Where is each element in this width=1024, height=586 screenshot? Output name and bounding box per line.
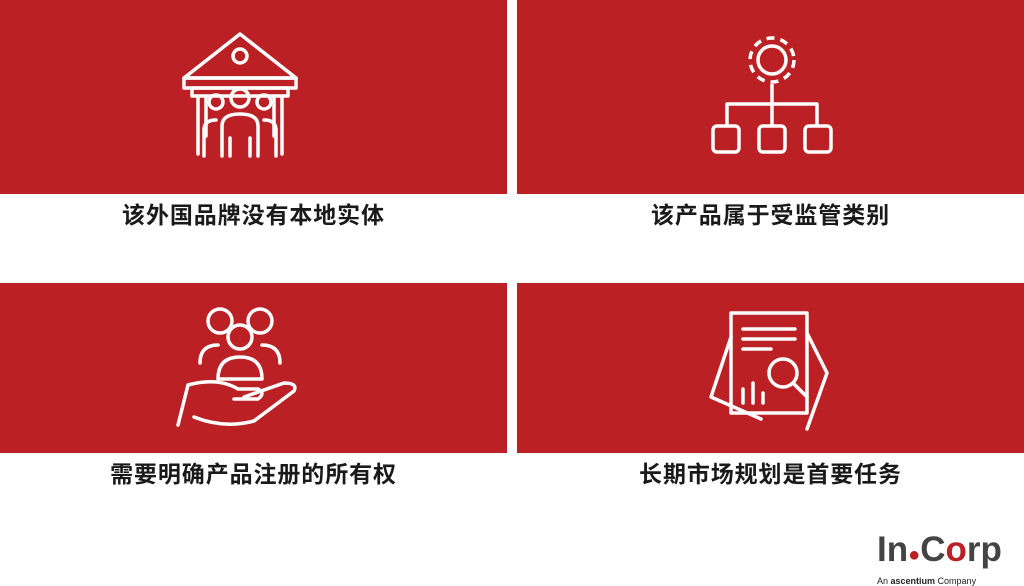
icon: government building with people bbox=[182, 32, 298, 158]
text: caption bottom-right: 长期市场规划是首要任务 bbox=[639, 461, 902, 487]
logo: InCorp bbox=[877, 530, 1002, 586]
text: caption bottom-left: 需要明确产品注册的所有权 bbox=[110, 461, 397, 487]
icon: gear hierarchy bbox=[711, 36, 833, 154]
icon: hand holding people bbox=[176, 307, 297, 427]
icon: document with magnifier bbox=[709, 311, 829, 431]
logo: InCorp: In●Corp bbox=[877, 530, 1002, 569]
panel: bottom-left bbox=[0, 283, 507, 453]
panel: bottom-right bbox=[517, 283, 1024, 453]
logo: InCorp: An ascentium Company bbox=[877, 576, 976, 586]
panel: top-left bbox=[0, 0, 507, 194]
text: caption top-right: 该产品属于受监管类别 bbox=[651, 202, 890, 228]
panel: top-right bbox=[517, 0, 1024, 194]
text: caption top-left: 该外国品牌没有本地实体 bbox=[122, 202, 385, 228]
